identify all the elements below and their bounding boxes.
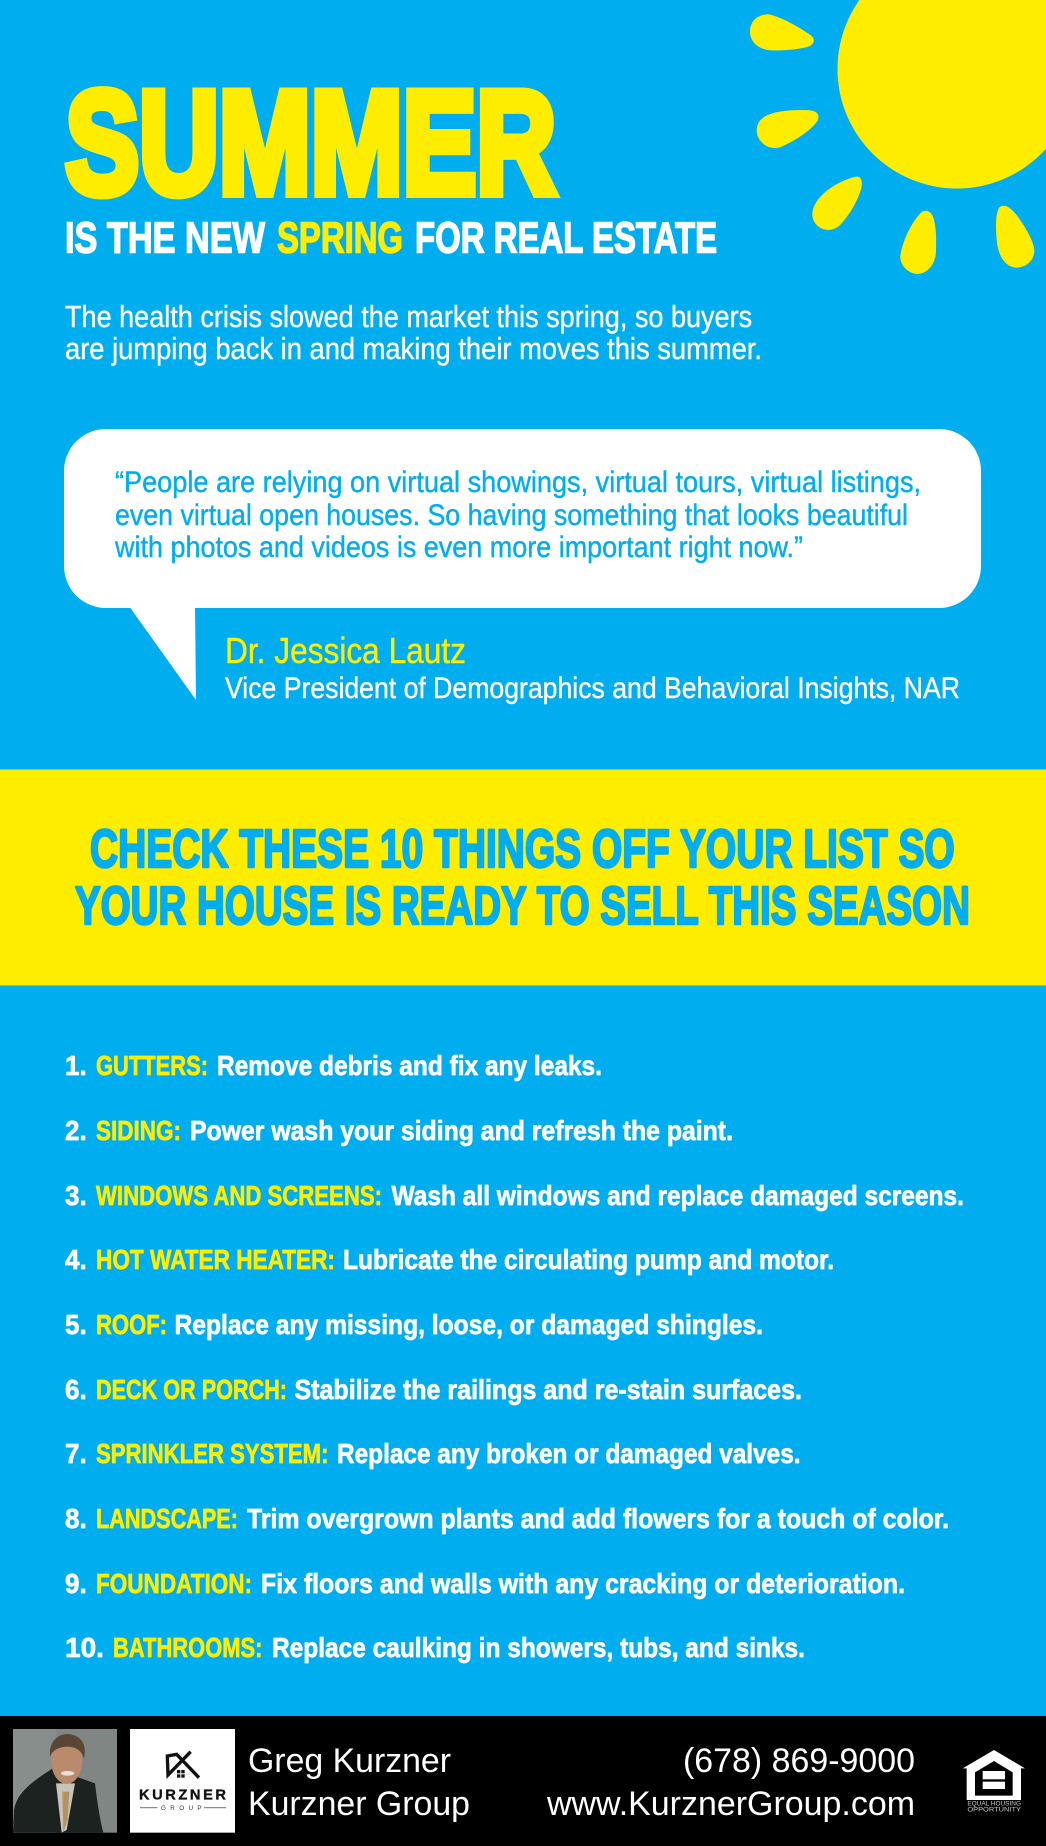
item 6 <box>65 1373 802 1406</box>
Kurzner Group logo: KURZNER <box>139 1787 226 1803</box>
quote attribution <box>225 631 960 705</box>
item 7: Replace any broken or damaged valves. <box>337 1437 801 1469</box>
panel: yellow checklist banner <box>0 770 1046 986</box>
item 5: ROOF: <box>96 1310 167 1341</box>
quote attribution: Dr. Jessica Lautz <box>225 631 466 671</box>
item 10: 10. <box>65 1632 104 1663</box>
quote text <box>114 466 921 564</box>
contact details <box>546 1742 915 1823</box>
quote text: even virtual open houses. So having something that looks beautiful <box>115 499 908 532</box>
subtitle: IS THE NEW <box>65 213 266 263</box>
item 6: Stabilize the railings and re-stain surfaces. <box>294 1373 802 1405</box>
icon: equal housing opportunity: EQUAL HOUSING <box>967 1802 1021 1808</box>
quote text: with photos and videos is even more important right now.” <box>114 531 803 564</box>
item 10: Replace caulking in showers, tubs, and sinks. <box>272 1631 805 1663</box>
intro paragraph: The health crisis slowed the market this spring, so buyers <box>65 300 752 334</box>
item 1: 1. <box>65 1050 87 1081</box>
item 7: 7. <box>65 1438 87 1469</box>
item 3: 3. <box>65 1180 87 1211</box>
item 5: Replace any missing, loose, or damaged shingles. <box>174 1308 763 1340</box>
item 8: Trim overgrown plants and add flowers for a touch of color. <box>247 1502 949 1534</box>
quote text: “People are relying on virtual showings, virtual tours, virtual listings, <box>115 466 921 499</box>
item 6: 6. <box>65 1374 87 1405</box>
quote attribution: Vice President of Demographics and Behavioral Insights, NAR <box>225 672 960 705</box>
contact details: (678) 869-9000 <box>683 1742 915 1780</box>
subtitle: FOR REAL ESTATE <box>415 214 717 263</box>
contact details: www.KurznerGroup.com <box>546 1785 915 1823</box>
item 10: BATHROOMS: <box>113 1633 262 1664</box>
speech bubble quote <box>64 429 981 700</box>
title: SUMMER <box>66 62 556 225</box>
item 2: SIDING: <box>96 1116 181 1147</box>
item 3: WINDOWS AND SCREENS: <box>96 1181 382 1212</box>
banner heading: CHECK THESE 10 THINGS OFF YOUR LIST SO <box>90 818 955 878</box>
item 4: Lubricate the circulating pump and motor. <box>343 1243 834 1275</box>
icon: equal housing opportunity: OPPORTUNITY <box>967 1807 1021 1813</box>
Kurzner Group logo: GROUP <box>161 1805 202 1812</box>
item 9: FOUNDATION: <box>96 1569 252 1600</box>
item 5: 5. <box>65 1309 87 1340</box>
item 3: Wash all windows and replace damaged screens. <box>392 1179 964 1211</box>
item 1: Remove debris and fix any leaks. <box>217 1049 602 1081</box>
item 7: SPRINKLER SYSTEM: <box>96 1439 328 1470</box>
item 1: GUTTERS: <box>96 1051 208 1082</box>
item 3 <box>65 1179 964 1212</box>
item 8: LANDSCAPE: <box>96 1504 238 1535</box>
item 4: HOT WATER HEATER: <box>96 1245 335 1276</box>
item 2: Power wash your siding and refresh the paint. <box>190 1114 733 1146</box>
banner heading: YOUR HOUSE IS READY TO SELL THIS SEASON <box>75 876 970 937</box>
subtitle <box>65 213 717 263</box>
icon: equal housing opportunity <box>963 1750 1025 1813</box>
Kurzner Group logo <box>130 1729 235 1833</box>
agent name and company <box>248 1742 470 1823</box>
item 8: 8. <box>65 1503 87 1534</box>
intro paragraph: are jumping back in and making their moves this summer. <box>65 332 762 366</box>
subtitle: SPRING <box>277 214 403 263</box>
agent photo <box>13 1729 117 1833</box>
item 2: 2. <box>65 1115 87 1146</box>
agent name and company: Kurzner Group <box>248 1785 470 1823</box>
item 9: 9. <box>65 1568 87 1599</box>
intro paragraph <box>65 300 762 366</box>
item 4 <box>65 1243 834 1276</box>
panel: footer bar <box>0 1716 1046 1846</box>
item 6: DECK OR PORCH: <box>96 1375 287 1406</box>
icon: sun with rays <box>750 0 1046 274</box>
banner heading <box>75 818 970 937</box>
item 9: Fix floors and walls with any cracking or deterioration. <box>261 1567 905 1599</box>
panel: checklist <box>65 1049 964 1664</box>
agent name and company: Greg Kurzner <box>248 1742 451 1780</box>
item 4: 4. <box>65 1244 87 1275</box>
item 7 <box>65 1437 801 1470</box>
